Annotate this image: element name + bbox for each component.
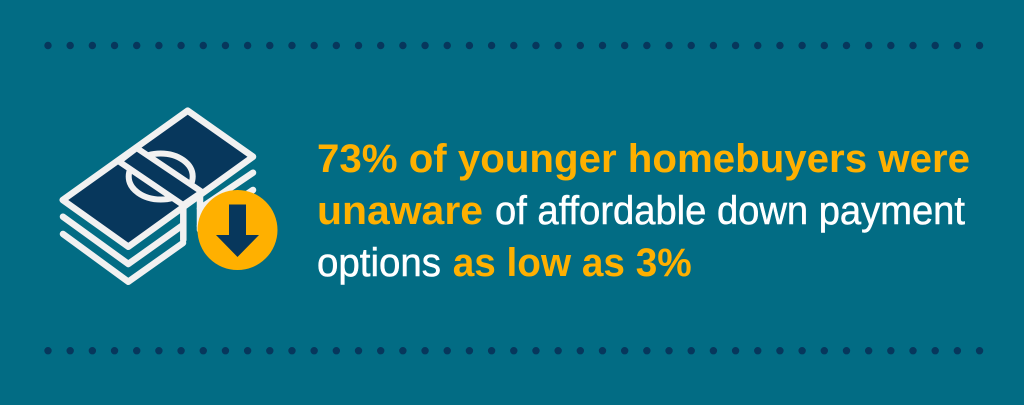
arrow badge [198, 190, 278, 270]
icon: stack of money with down arrow [63, 111, 278, 282]
statistic text [317, 137, 970, 285]
line 3 body: options [317, 241, 441, 285]
line 2 highlight: unaware [317, 189, 483, 233]
bill centre circle [129, 154, 193, 200]
line 3 highlight: as low as 3% [453, 241, 692, 285]
bottom dotted divider [48, 347, 981, 354]
top bill [63, 111, 253, 247]
line 1: 73% of younger homebuyers were [317, 137, 970, 181]
paper band [119, 148, 202, 205]
line 2 body: of affordable down payment [495, 189, 965, 233]
lower bill layers [63, 173, 253, 282]
top dotted divider [48, 42, 981, 49]
